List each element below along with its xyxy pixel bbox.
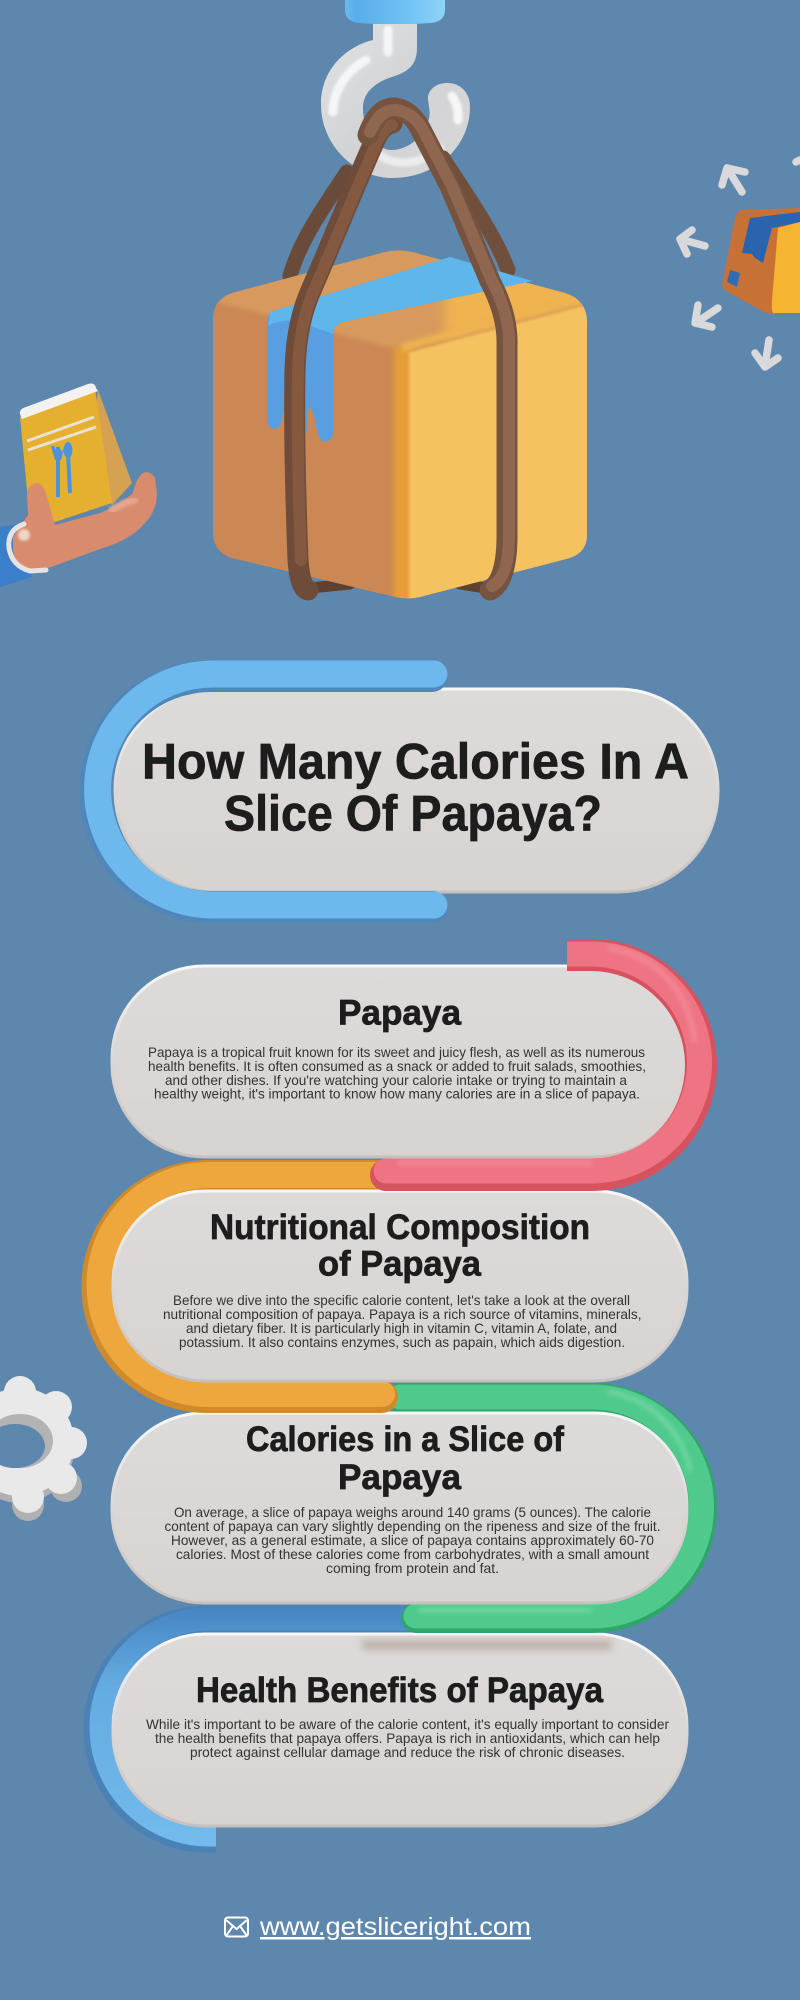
- shadow cast by green tube: [362, 1640, 612, 1650]
- body text: protect against cellular damage and reduce the risk of chronic diseases.: [190, 1745, 625, 1760]
- body text: Papaya is a tropical fruit known for its sweet and juicy flesh, as well as its numerous: [148, 1045, 645, 1060]
- body text: and dietary fiber. It is particularly high in vitamin C, vitamin A, folate, and: [186, 1321, 617, 1336]
- gear depth: [0, 1395, 82, 1521]
- icon: crane hook lifting parcel: [210, 0, 600, 608]
- body text: and other dishes. If you're watching your calorie intake or trying to maintain a: [165, 1073, 627, 1088]
- panel: nutritional composition of papaya: [98, 1169, 687, 1397]
- panel: papaya: [112, 948, 701, 1191]
- heading: [210, 1208, 590, 1284]
- panel: health benefits of papaya: [98, 1619, 687, 1838]
- body text: However, as a general estimate, a slice of papaya contains approximately 60-70: [171, 1533, 654, 1548]
- title text: Slice Of Papaya?: [224, 786, 602, 842]
- footer: website: [225, 1913, 531, 1941]
- body text: On average, a slice of papaya weighs around 140 grams (5 ounces). The calorie: [174, 1505, 651, 1520]
- body text: coming from protein and fat.: [326, 1561, 499, 1576]
- icon: parcel with arrows: [680, 160, 800, 367]
- icon: hand holding food package: [0, 384, 157, 587]
- body text: [148, 1045, 646, 1102]
- card: [113, 1191, 687, 1381]
- green tube: [400, 1392, 702, 1618]
- heading: of Papaya: [318, 1244, 482, 1284]
- package: [20, 384, 132, 522]
- icon: gear: [0, 1376, 87, 1521]
- title text: How Many Calories In A: [142, 734, 689, 790]
- body text: healthy weight, it's important to know how many calories are in a slice of papaya.: [154, 1086, 640, 1102]
- body text: content of papaya can vary slightly depending on the ripeness and size of the fruit.: [164, 1519, 660, 1534]
- body text: While it's important to be aware of the calorie content, it's equally important to consider: [146, 1717, 669, 1732]
- cuff: [9, 524, 46, 571]
- card: [112, 966, 687, 1157]
- body text: potassium. It also contains enzymes, such as papain, which aids digestion.: [179, 1335, 625, 1350]
- body text: nutritional composition of papaya. Papaya is a rich source of vitamins, minerals,: [163, 1307, 642, 1322]
- blue tube frame: [96, 667, 434, 907]
- body text: [163, 1293, 642, 1350]
- heading: [246, 1420, 564, 1497]
- heading: Health Benefits of Papaya: [196, 1671, 604, 1710]
- heading: Nutritional Composition: [210, 1208, 590, 1247]
- body text: calories. Most of these calories come from carbohydrates, with a small amount: [176, 1547, 649, 1562]
- orange tube: [98, 1169, 400, 1397]
- blue tube: [98, 1619, 430, 1838]
- crane hook: [321, 0, 470, 178]
- body text: health benefits. It is often consumed as a snack or added to fruit salads, smoothies,: [148, 1059, 646, 1074]
- back straps and under-box strap: [290, 158, 508, 590]
- card: [112, 1413, 687, 1603]
- lifting strap: [295, 108, 509, 590]
- title text: [142, 734, 689, 842]
- panel: title: [96, 667, 718, 907]
- heading: Calories in a Slice of: [246, 1420, 564, 1459]
- body text: the health benefits that papaya offers. Papaya is rich in antioxidants, which can help: [155, 1731, 660, 1746]
- gear hole: [0, 1414, 53, 1468]
- gear face: [0, 1376, 87, 1513]
- card: [113, 1634, 687, 1826]
- title pill: [115, 689, 718, 892]
- heading: Papaya: [338, 1458, 462, 1497]
- pink tube: [370, 948, 701, 1191]
- hand: [13, 472, 157, 571]
- icon: envelope: [225, 1918, 248, 1936]
- body text: Before we dive into the specific calorie content, let's take a look at the overall: [173, 1293, 630, 1308]
- body text: [164, 1505, 660, 1576]
- website url: www.getsliceright.com: [259, 1913, 531, 1941]
- body text: [146, 1717, 669, 1760]
- panel: calories in a slice of papaya: [112, 1392, 702, 1618]
- heading: Papaya: [338, 994, 462, 1032]
- sleeve: [0, 523, 32, 587]
- arrows: [680, 160, 800, 367]
- parcel box: [210, 240, 600, 608]
- blue tape: [267, 257, 532, 441]
- parcel: [722, 208, 800, 314]
